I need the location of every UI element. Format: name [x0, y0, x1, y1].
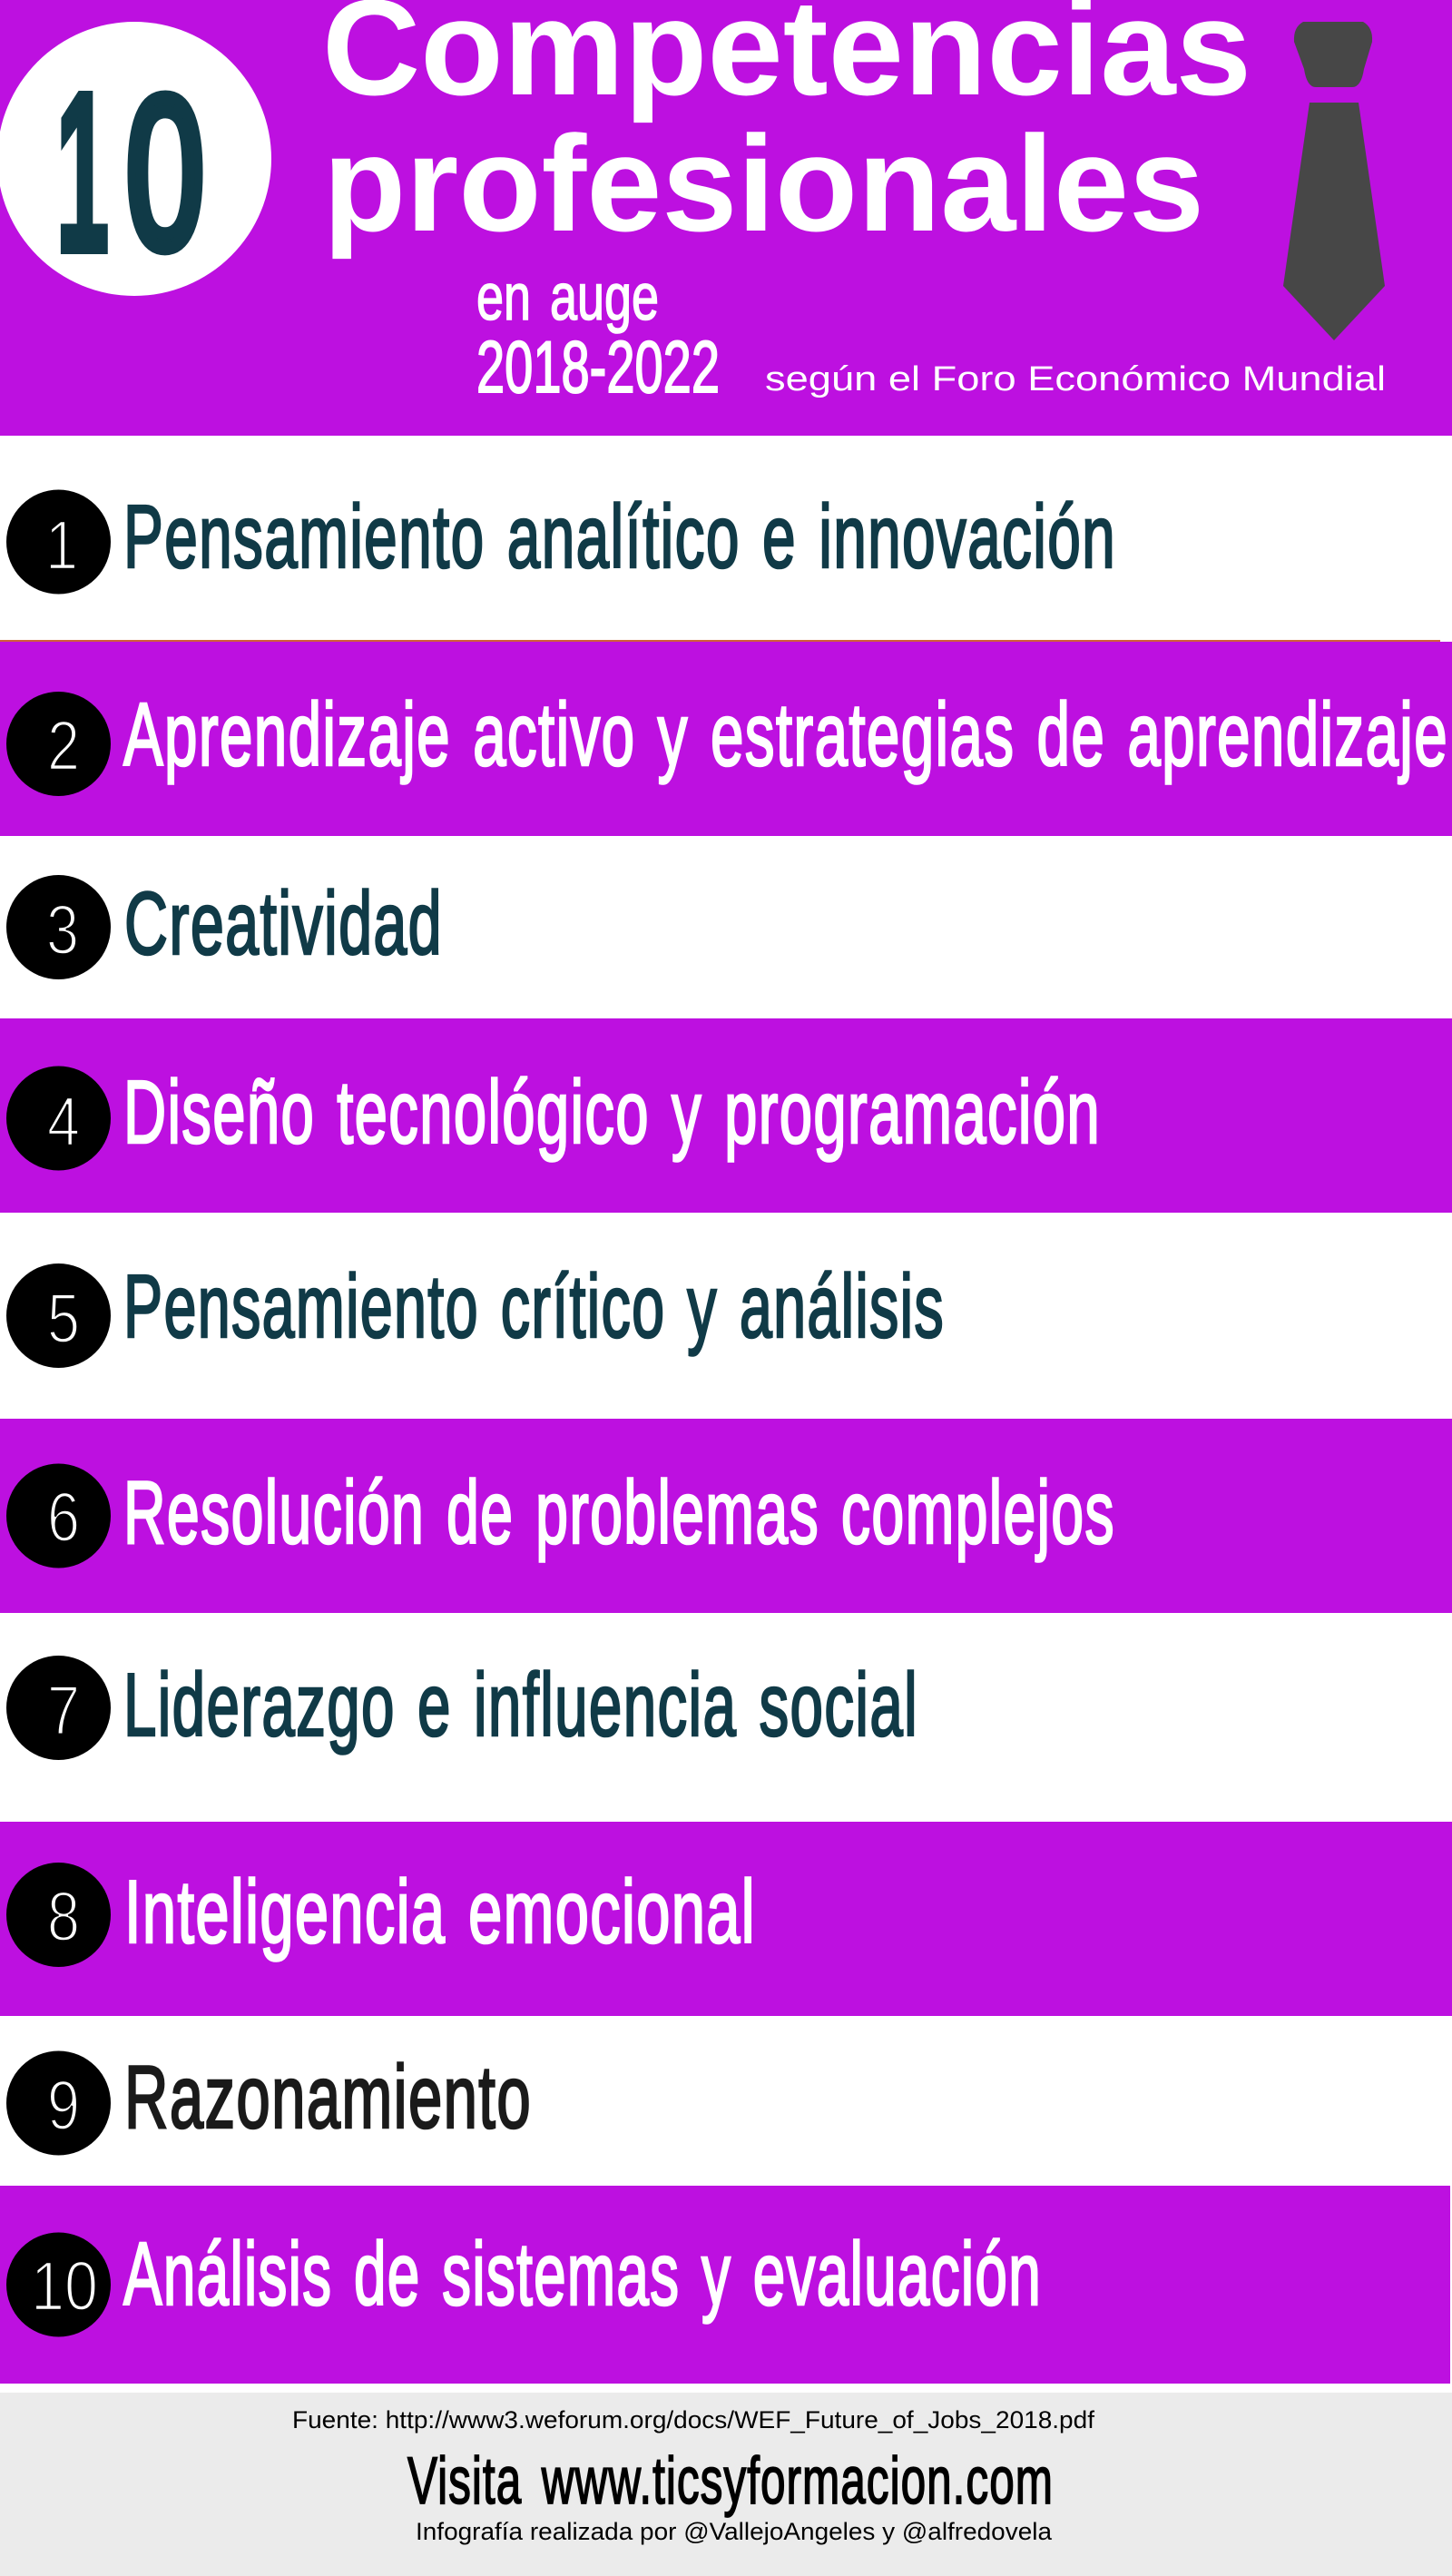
number circle [6, 1066, 111, 1171]
number circle [6, 875, 111, 979]
source note: según el Foro Económico Mundial [765, 360, 1386, 398]
divider line [0, 640, 1440, 642]
website call to action: Visita www.ticsyformacion.com [407, 2444, 1054, 2518]
subtitle: en auge 2018-2022 [476, 261, 720, 408]
number: 4 [47, 1083, 80, 1161]
number: 9 [47, 2067, 80, 2145]
label: Razonamiento [124, 2047, 532, 2147]
row 9 [6, 2047, 532, 2155]
row 3 [6, 873, 443, 979]
band [0, 1018, 1452, 1213]
number circle [6, 1263, 111, 1368]
row 10 [0, 2186, 1450, 2384]
footer panel [0, 2393, 1452, 2576]
label: Inteligencia emocional [124, 1862, 756, 1961]
label: Liderazgo e influencia social [123, 1655, 918, 1755]
icon: necktie [1283, 22, 1385, 340]
band [0, 642, 1452, 836]
label: Creatividad [124, 873, 443, 973]
row 6 [0, 1419, 1452, 1613]
band [0, 1822, 1452, 2016]
row 4 [0, 1018, 1452, 1213]
row 8 [0, 1822, 1452, 2016]
subtitle: en auge 2018-2022: 2018-2022 [476, 327, 720, 408]
number circle [6, 1656, 111, 1760]
number: 10 [31, 2247, 98, 2325]
band [0, 2186, 1450, 2384]
number: 6 [47, 1479, 80, 1557]
number circle [6, 1863, 111, 1967]
number: 7 [47, 1672, 80, 1750]
label: Pensamiento crítico y análisis [123, 1256, 945, 1356]
number: 3 [46, 891, 79, 969]
number: 2 [47, 707, 80, 785]
number: 8 [47, 1878, 80, 1956]
credits: Infografía realizada por @VallejoAngeles y @alfredovela [416, 2518, 1053, 2545]
badge: big number 10: 1 [56, 45, 109, 299]
number circle [6, 2233, 111, 2336]
row 1 [0, 487, 1440, 642]
title: profesionales [323, 107, 1204, 260]
footer background [0, 2393, 1452, 2576]
number circle [6, 490, 111, 594]
header background [0, 0, 1452, 436]
row 2 [0, 642, 1452, 836]
number circle [6, 2051, 111, 2155]
source: Fuente: http://www3.weforum.org/docs/WEF_Future_of_Jobs_2018.pdf [292, 2406, 1095, 2433]
row 5 [6, 1256, 945, 1368]
badge: big number 10: 0 [126, 53, 204, 293]
subtitle: en auge 2018-2022: en auge [476, 261, 659, 334]
row 7 [6, 1655, 918, 1760]
band [0, 1419, 1452, 1613]
number circle [6, 692, 111, 796]
badge: big number 10 [0, 22, 271, 299]
title [322, 0, 1251, 260]
number: 1 [45, 506, 78, 585]
number: 5 [47, 1280, 80, 1358]
header panel [0, 0, 1452, 436]
number circle [6, 1463, 111, 1568]
